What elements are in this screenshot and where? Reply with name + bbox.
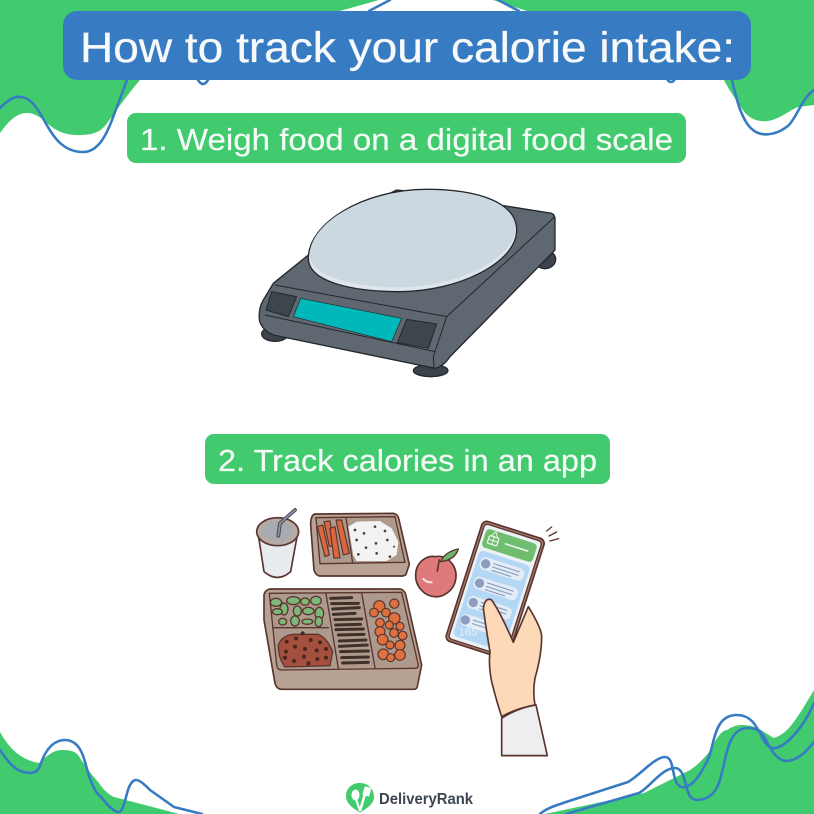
green beans	[331, 598, 368, 663]
leafy greens	[270, 596, 324, 627]
DeliveryRank logo: DeliveryRank	[379, 791, 473, 808]
icon: smartphone	[445, 520, 546, 660]
small tray	[311, 513, 409, 576]
sleeve	[502, 705, 547, 756]
meatballs	[370, 599, 407, 662]
meat	[278, 634, 333, 667]
large tray	[264, 589, 422, 689]
icon: hand	[483, 599, 542, 717]
app header	[481, 528, 538, 563]
illustration: apple, phone and hand	[416, 520, 559, 756]
DeliveryRank logo	[346, 783, 473, 812]
bottom background waves	[0, 690, 814, 814]
icon: drink cup	[257, 510, 299, 577]
logo icon	[346, 783, 374, 812]
title banner	[63, 11, 751, 80]
top background waves	[0, 0, 814, 152]
icon: apple	[416, 549, 458, 597]
icon: digital food scale	[259, 189, 556, 377]
carrots	[317, 520, 349, 558]
step 1 heading	[127, 113, 686, 163]
app list panel: 165	[459, 626, 477, 638]
rice	[348, 521, 398, 561]
scale feet	[262, 250, 556, 377]
scale display	[293, 298, 402, 342]
phone buzz marks	[547, 527, 559, 541]
scale left button	[266, 292, 297, 317]
step 2 heading: 2. Track calories in an app	[218, 443, 597, 478]
scale right button	[397, 319, 437, 348]
step 1 heading: 1. Weigh food on a digital food scale	[140, 122, 673, 157]
scale body	[259, 190, 555, 368]
scale platter	[308, 189, 517, 292]
title banner: How to track your calorie intake:	[80, 24, 735, 72]
illustration: meal trays and drink	[257, 510, 422, 689]
step 2 heading	[205, 434, 610, 484]
